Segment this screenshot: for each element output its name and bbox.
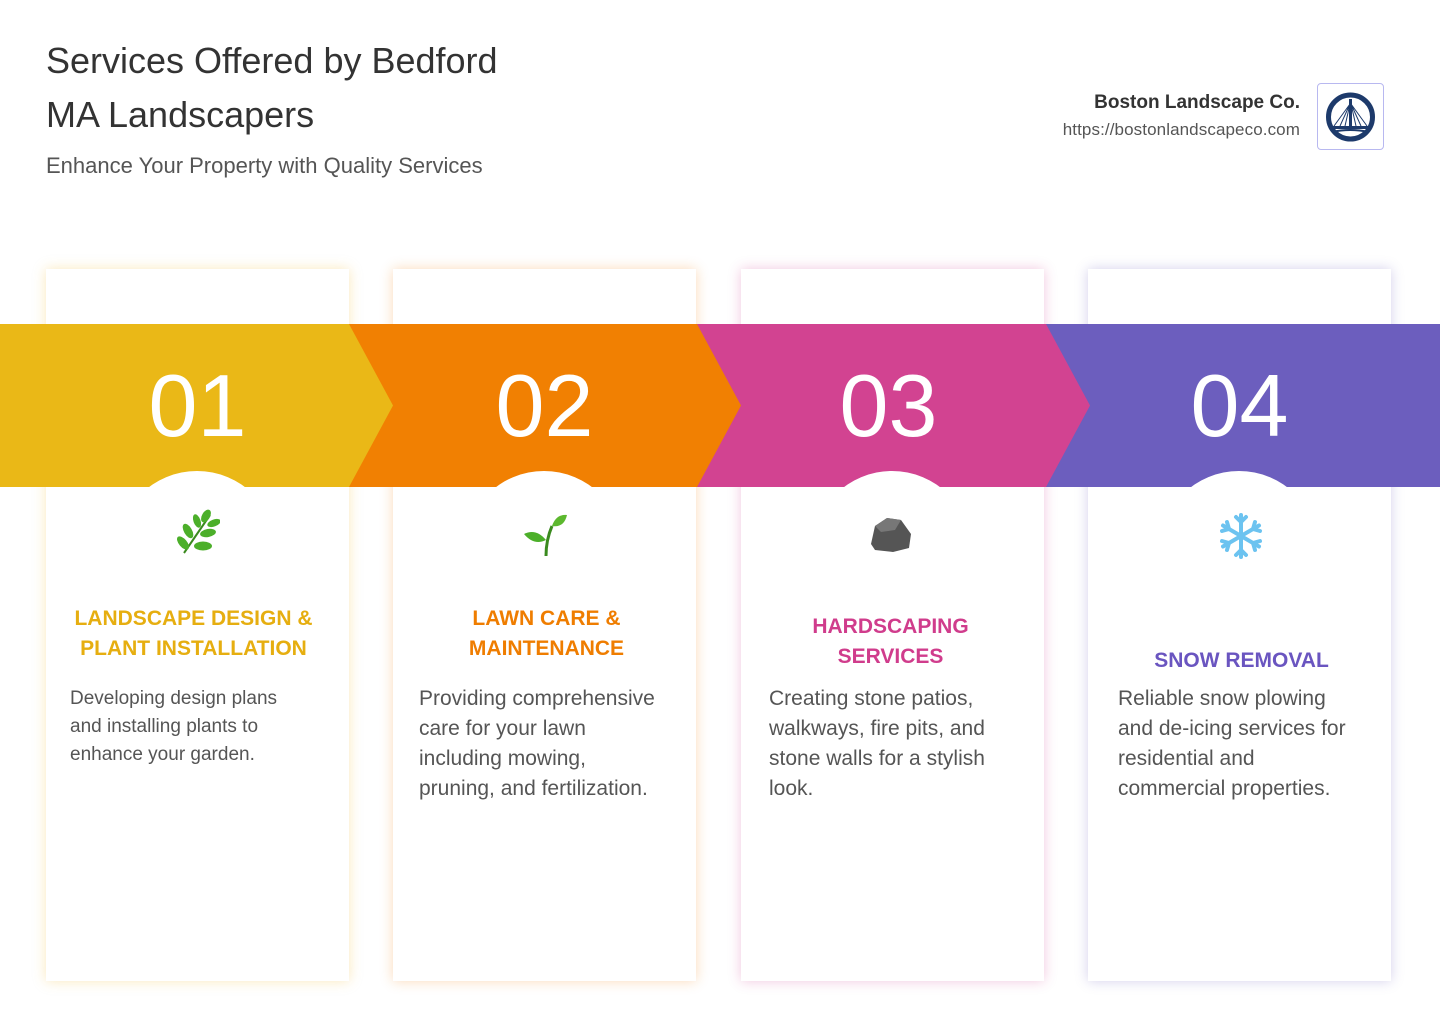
text 2: Providing comprehensive care for your lawn including mowing, pruning, and fertilization. — [419, 687, 655, 800]
heading 3: SERVICES — [838, 645, 943, 668]
brand url: https://bostonlandscapeco.com — [1063, 120, 1300, 139]
number 01: 01 — [149, 356, 246, 455]
number 03: 03 — [840, 356, 937, 455]
arrow banner — [0, 324, 1440, 487]
icon: herb — [177, 510, 220, 554]
icon: seedling — [524, 514, 567, 556]
heading 3 — [812, 615, 969, 668]
number 04: 04 — [1191, 356, 1288, 455]
heading 2: LAWN CARE & — [472, 607, 621, 630]
heading 1: LANDSCAPE DESIGN & — [74, 607, 313, 630]
brand name: Boston Landscape Co. — [1094, 92, 1300, 113]
icon: logo — [1317, 83, 1384, 150]
heading 4: SNOW REMOVAL — [1154, 649, 1329, 672]
heading 2 — [469, 607, 624, 660]
text 1: Developing design plans and installing plants to enhance your garden. — [70, 688, 277, 765]
heading 2: MAINTENANCE — [469, 637, 624, 660]
panel: card 1 — [46, 269, 349, 981]
heading 1: PLANT INSTALLATION — [80, 637, 307, 660]
text 3: Creating stone patios, walkways, fire pits, and stone walls for a stylish look. — [769, 687, 985, 800]
panel: card 2 — [393, 269, 696, 981]
heading 3: HARDSCAPING — [812, 615, 969, 638]
brand block — [1063, 83, 1384, 150]
circles — [117, 471, 277, 631]
heading 1 — [74, 607, 313, 660]
panel: card 3 — [741, 269, 1044, 981]
text 4: Reliable snow plowing and de-icing services for residential and commercial properties. — [1118, 687, 1346, 800]
icon: snowflake — [1220, 513, 1262, 559]
subtitle: Enhance Your Property with Quality Services — [46, 153, 483, 178]
number 02: 02 — [496, 356, 593, 455]
title: Services Offered by Bedford MA Landscapers — [46, 40, 498, 135]
icon: rock — [871, 518, 911, 552]
panel: card 4 — [1088, 269, 1391, 981]
